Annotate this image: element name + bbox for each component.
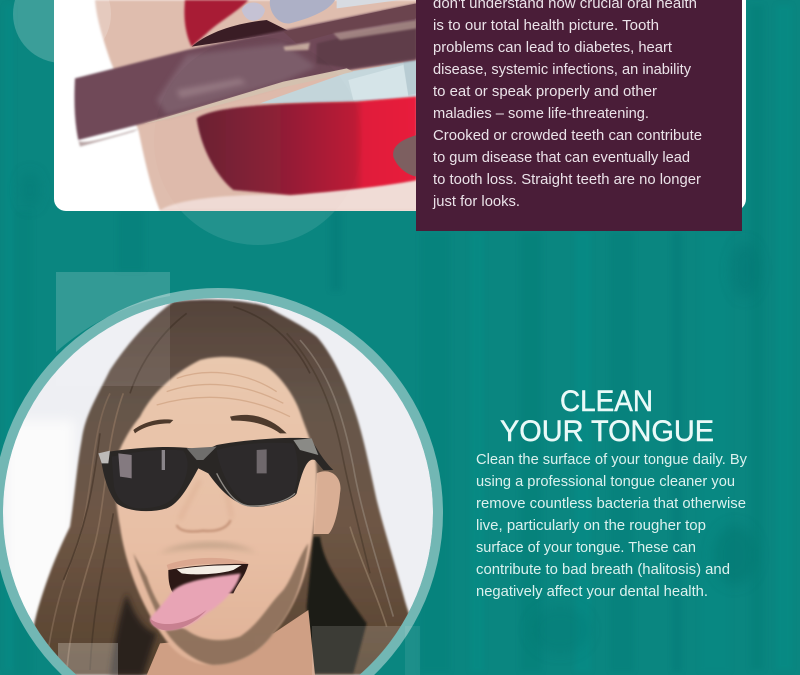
tongue cleaning body text: contribute to bad breath (halitosis) and	[476, 561, 730, 578]
ring around portrait	[0, 288, 443, 675]
translucent squares outside portrait	[56, 272, 420, 675]
upper teeth	[242, 2, 265, 21]
sunglasses	[98, 438, 333, 511]
tongue cleaning body text: negatively affect your dental health.	[476, 583, 708, 600]
hair strands	[47, 307, 393, 673]
tongue cleaning body text	[476, 451, 747, 600]
tongue cleaning body text: Clean the surface of your tongue daily. By	[476, 451, 747, 468]
mouth and tongue	[150, 558, 248, 630]
skin	[95, 0, 420, 211]
chocolate piece on lip	[393, 135, 417, 177]
hair shadow at right	[307, 537, 367, 673]
tongue cleaning body text: surface of your tongue. These can	[476, 539, 696, 556]
panel body text: disease, systemic infections, an inability	[433, 61, 691, 78]
panel body text: Crooked or crowded teeth can contribute	[433, 127, 702, 144]
tongue cleaning body text: using a professional tongue cleaner you	[476, 473, 735, 490]
panel body text: maladies – some life-threatening.	[433, 105, 649, 122]
neck	[147, 610, 315, 675]
heading: clean your tongue: YOUR TONGUE	[500, 415, 714, 448]
translucent squares over portrait	[58, 304, 400, 675]
panel body text	[432, 0, 702, 210]
eyebrows	[133, 419, 173, 433]
forehead wrinkles	[157, 372, 290, 417]
translucent circles on background	[13, 0, 362, 245]
face	[115, 357, 317, 665]
lower lip	[197, 97, 417, 195]
purple text panel	[416, 0, 742, 231]
nose	[177, 520, 231, 532]
portrait: man with sunglasses sticking out tongue	[0, 272, 440, 675]
hair	[28, 300, 412, 675]
tongue cleaning body text: remove countless bacteria that otherwise	[476, 495, 746, 512]
panel body text: just for looks.	[432, 193, 520, 210]
panel body text: to eat or speak properly and other	[433, 83, 657, 100]
upper lip and mouth interior	[184, 0, 248, 47]
chocolate bar	[74, 3, 417, 147]
heading: clean your tongue: CLEAN	[560, 385, 653, 418]
panel body text: to tooth loss. Straight teeth are no longer	[433, 171, 701, 188]
heading: clean your tongue	[500, 385, 714, 448]
panel body text: to gum disease that can eventually lead	[433, 149, 690, 166]
lower teeth	[260, 60, 417, 103]
beard	[133, 543, 308, 665]
tongue cleaning body text: live, particularly on the rougher top	[476, 517, 706, 534]
ear	[313, 471, 341, 534]
panel body text: problems can lead to diabetes, heart	[433, 39, 673, 56]
photo card: chocolate bar between red lips	[54, 0, 746, 211]
translucent circles over the photo	[96, 0, 111, 40]
panel body text: is to our total health picture. Tooth	[433, 17, 659, 34]
